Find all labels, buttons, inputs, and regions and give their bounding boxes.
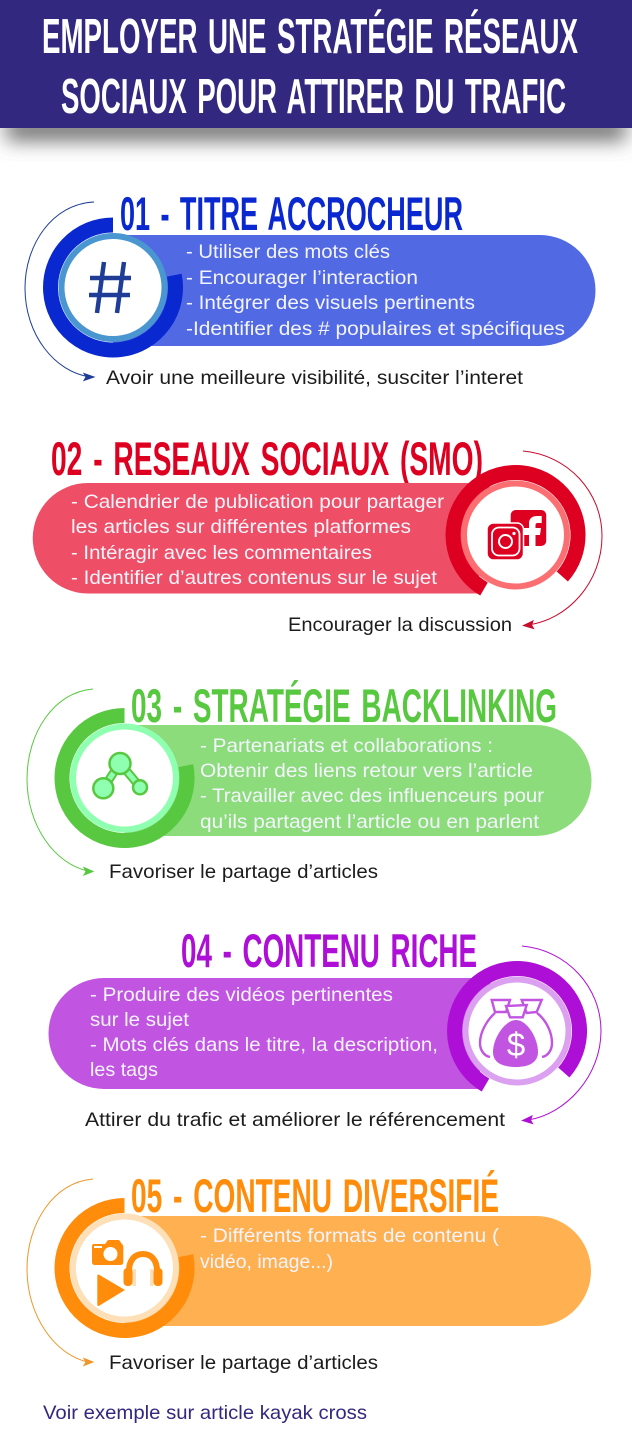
pill 03 [124,725,592,836]
icon: facebook and instagram [487,510,546,560]
bullet text 02: - Calendrier de publication pour partager [71,491,445,513]
bullet text 04: sur le sujet [90,1009,190,1031]
icon: share nodes [93,753,147,798]
pill 01 [113,235,596,346]
caption 05: Favoriser le partage d’articles [109,1352,378,1374]
ring 05 [62,1206,187,1331]
arrow 01 [25,202,94,380]
ring 02 [453,473,578,589]
panel: 04 contenu riche [49,924,601,1131]
pill 04 [49,978,491,1089]
bullet text 04: - Mots clés dans le titre, la description, [90,1034,438,1056]
bullet text 05: - Différents formats de contenu ( [200,1225,500,1247]
bullet text 01: -Identifier des # populaires et spécifiques [186,318,565,340]
bullet text 02: les articles sur différentes platformes [71,516,411,538]
bullet text 01: - Utiliser des mots clés [186,241,390,263]
bullet text 01 [186,241,565,340]
arrow 04 [522,946,601,1124]
arrow 03 [27,689,93,875]
bullet text 01: - Intégrer des visuels pertinents [186,292,475,314]
bullet text 04: les tags [90,1059,158,1081]
caption 03: Favoriser le partage d’articles [109,861,378,883]
bullet text 05: vidéo, image...) [200,1251,333,1273]
bullet text 05 [200,1225,500,1273]
bullet text 04: - Produire des vidéos pertinentes [90,984,393,1006]
bullet text 03 [200,735,545,833]
bullet text 02: - Intéragir avec les commentaires [71,542,372,564]
icon: camera, headphones, play [92,1240,162,1306]
pill 05 [124,1216,591,1326]
title [42,10,578,124]
ring 01 [51,225,176,350]
ring 04 [455,969,580,1085]
bullet text 02: - Identifier d’autres contenus sur le sujet [71,567,438,589]
header banner [0,0,632,140]
caption 01: Avoir une meilleure visibilité, susciter l’interet [106,367,524,389]
icon: money bags [480,1000,552,1067]
caption 04: Attirer du trafic et améliorer le référencement [85,1109,506,1131]
footer link text: Voir exemple sur article kayak cross [43,1402,367,1424]
bullet text 03: qu’ils partagent l’article ou en parlent [200,811,540,833]
caption 02: Encourager la discussion [288,614,512,636]
arrow 05 [27,1179,93,1366]
panel: 05 contenu diversifie [27,1169,591,1374]
panel: 01 titre accrocheur [25,187,596,389]
panel: 02 reseaux sociaux [33,432,602,636]
bullet text 03: - Partenariats et collaborations : [200,735,493,757]
ring 03 [62,716,187,840]
pill 02 [33,483,490,594]
panel: 03 strategie backlinking [27,679,592,883]
bullet text 01: - Encourager l’interaction [186,267,418,289]
bullet text 04 [90,984,438,1081]
bullet text 03: Obtenir des liens retour vers l’article [200,760,533,782]
arrow 02 [523,451,602,628]
dollar sign: $ [507,1026,525,1063]
bullet text 03: - Travailler avec des influenceurs pour [200,785,545,807]
bullet text 02 [71,491,445,589]
icon: hashtag [89,262,131,313]
